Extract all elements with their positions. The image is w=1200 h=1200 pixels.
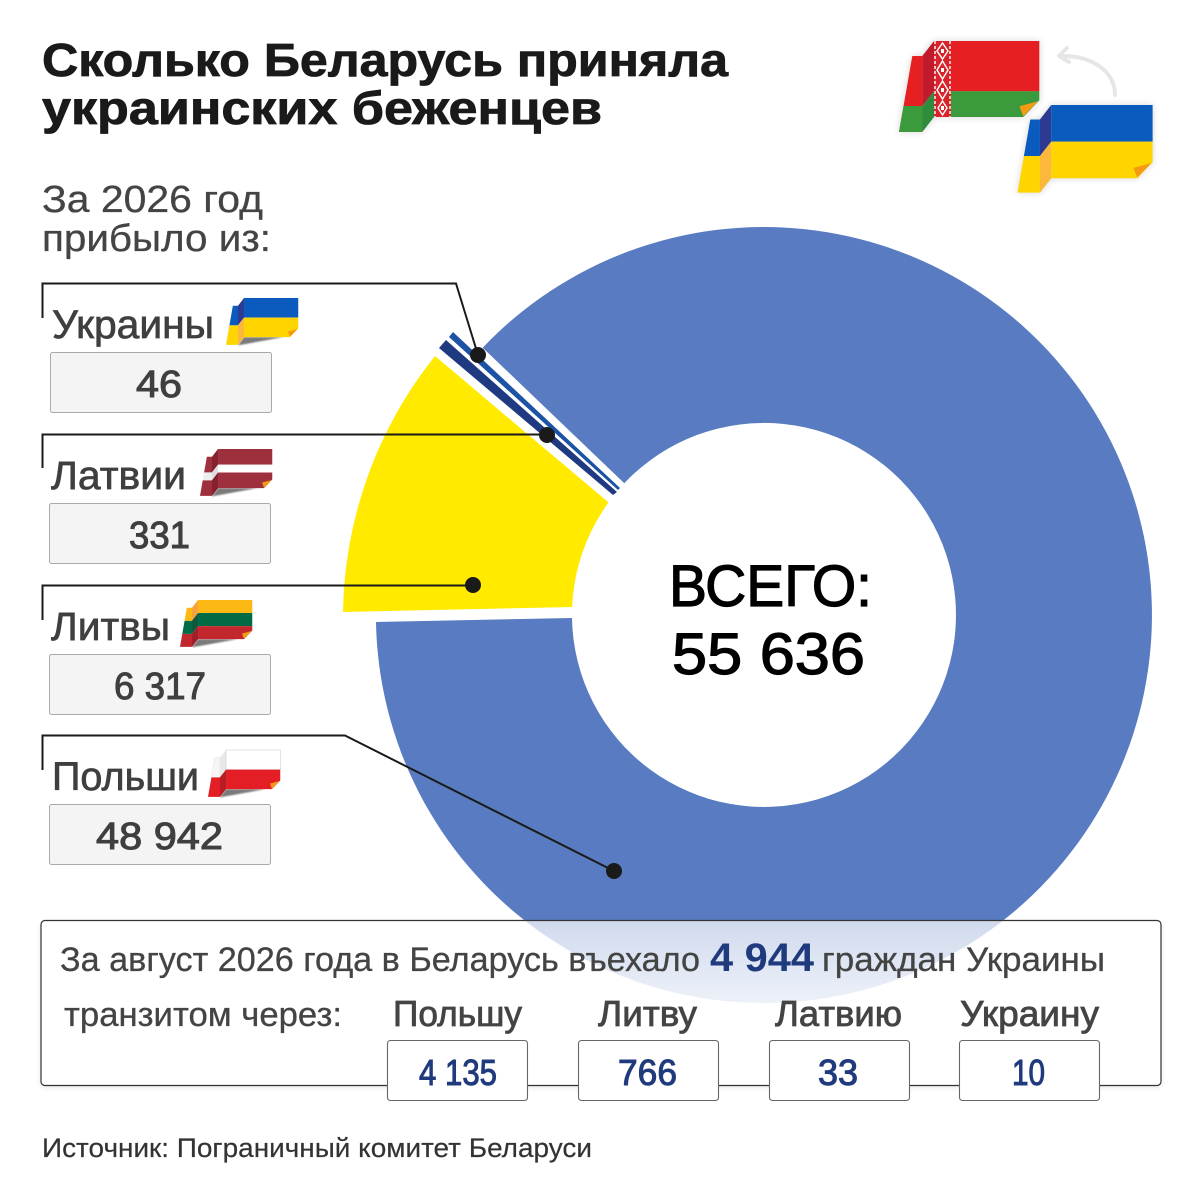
sentence bbox=[60, 936, 1105, 980]
value box bbox=[50, 352, 272, 412]
title: Сколько Беларусь приняла bbox=[42, 34, 728, 86]
column: Lithuania: 766 bbox=[618, 1052, 677, 1093]
value: 6 317 bbox=[114, 666, 206, 708]
total label: ВСЕГО: bbox=[669, 554, 872, 619]
icon: flag of Belarus bbox=[899, 41, 1039, 132]
leader line: Latvia bbox=[42, 427, 555, 468]
donut chart bbox=[343, 227, 1152, 1003]
panel: Latvia arrivals bbox=[50, 449, 272, 564]
column: Latvia: 33 bbox=[818, 1052, 858, 1093]
column: Ukraine: 10 bbox=[1012, 1052, 1045, 1093]
segment: Poland bbox=[376, 227, 1152, 1003]
sentence: За август 2026 года в Беларусь въехало bbox=[60, 941, 700, 979]
sentence: 4 944 bbox=[710, 936, 815, 980]
segment: Lithuania bbox=[343, 356, 608, 612]
label: Польши bbox=[52, 755, 199, 799]
column: Lithuania: Литву bbox=[598, 993, 697, 1034]
icon: flag of Ukraine bbox=[1018, 105, 1153, 193]
sentence: граждан Украины bbox=[822, 941, 1105, 979]
column: Latvia: Латвию bbox=[775, 993, 902, 1034]
value box bbox=[50, 804, 270, 864]
column: Poland: 4 135 bbox=[419, 1052, 497, 1093]
column: Ukraine bbox=[960, 993, 1100, 1100]
value box bbox=[50, 504, 270, 564]
segment: Latvia bbox=[439, 340, 617, 495]
arrow: from Ukraine to Belarus bbox=[1059, 48, 1115, 95]
leader line: Lithuania bbox=[42, 577, 481, 620]
value: 331 bbox=[129, 515, 190, 557]
icon: flag of Ukraine small bbox=[226, 298, 298, 345]
icon: flag of Poland small bbox=[208, 750, 280, 797]
value: 48 942 bbox=[96, 816, 223, 858]
icon: flag of Lithuania small bbox=[180, 600, 252, 647]
total label bbox=[669, 554, 872, 687]
column: Ukraine: Украину bbox=[960, 993, 1099, 1034]
panel: Lithuania arrivals bbox=[50, 600, 270, 714]
panel background bbox=[41, 920, 1161, 1086]
label: Литвы bbox=[51, 605, 170, 649]
panel: August transit bbox=[41, 920, 1161, 1100]
icon: flag of Latvia small bbox=[200, 449, 272, 496]
subheading: прибыло из: bbox=[42, 218, 271, 260]
segment: Ukraine bbox=[449, 332, 620, 490]
leader line: Poland bbox=[42, 736, 622, 879]
column: Poland: Польшу bbox=[393, 993, 522, 1034]
subheading: За 2026 год bbox=[42, 179, 263, 221]
value box bbox=[50, 654, 270, 714]
total label: 55 636 bbox=[672, 622, 865, 687]
column: Lithuania bbox=[578, 993, 718, 1100]
column: Poland bbox=[388, 993, 528, 1100]
leader line: Ukraine bbox=[42, 284, 486, 363]
label: Латвии bbox=[51, 454, 186, 498]
subheading bbox=[42, 179, 271, 260]
panel: Poland arrivals bbox=[50, 750, 280, 864]
value: 46 bbox=[136, 364, 182, 406]
source: Источник: Пограничный комитет Беларуси bbox=[42, 1133, 592, 1163]
transit label: транзитом через: bbox=[64, 996, 342, 1034]
label: Украины bbox=[52, 303, 214, 347]
title: украинских беженцев bbox=[42, 82, 602, 134]
panel: Ukraine arrivals bbox=[50, 298, 298, 412]
title bbox=[42, 34, 728, 134]
column: Latvia bbox=[770, 993, 910, 1100]
